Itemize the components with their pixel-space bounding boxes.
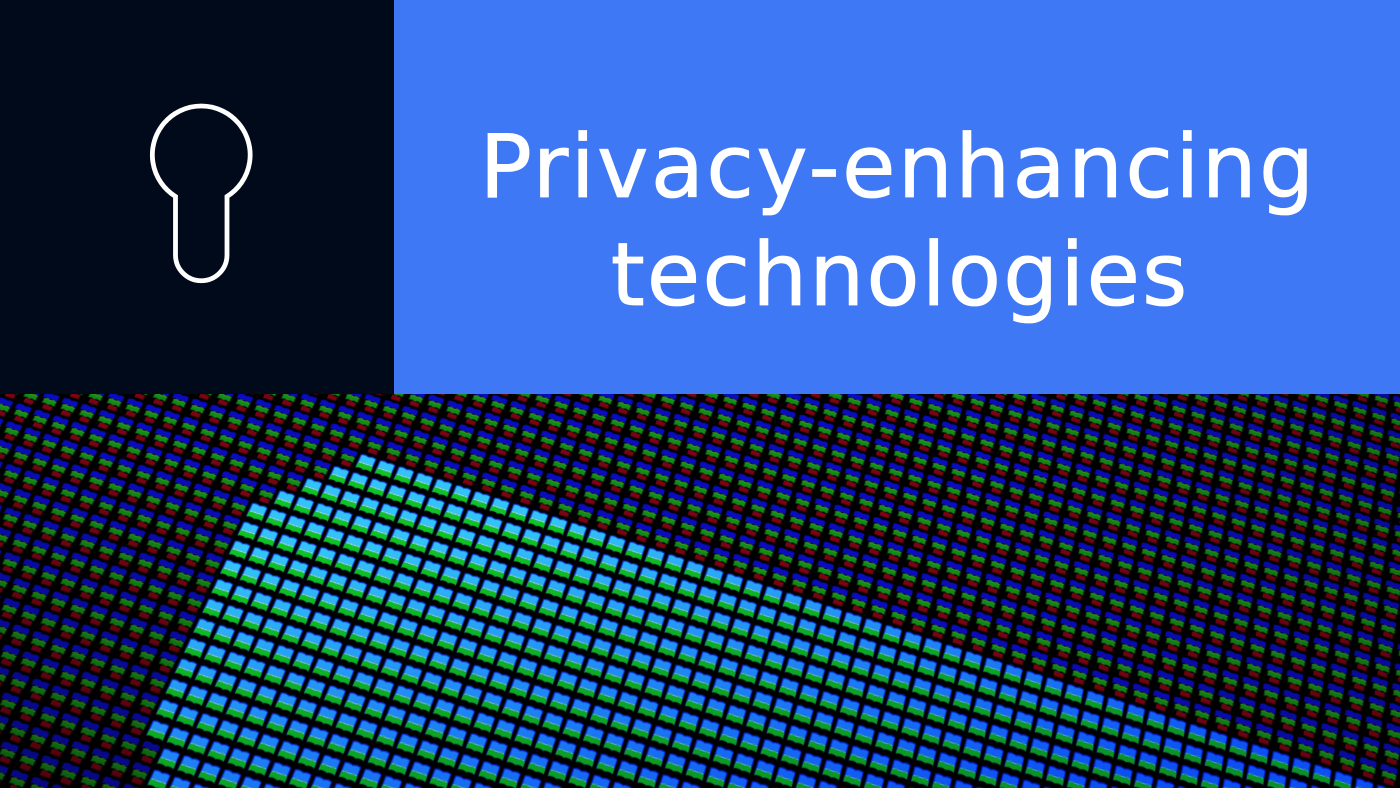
bright pixel region <box>0 427 1400 788</box>
panel: blue title tile <box>394 0 1400 394</box>
photo: macro view of screen pixels <box>0 394 1400 788</box>
title: technologies <box>611 224 1189 326</box>
deep blue fade inside the bright region <box>146 535 1389 788</box>
title: Privacy-enhancing <box>480 116 1316 218</box>
panel: dark keyhole tile <box>0 0 394 394</box>
icon: keyhole outline <box>150 104 253 284</box>
title <box>480 116 1316 326</box>
